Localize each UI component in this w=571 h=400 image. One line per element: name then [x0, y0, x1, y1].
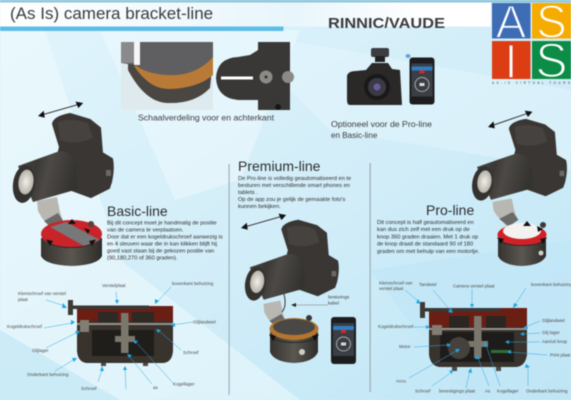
diagram: Basic-line cross-section — [7, 281, 216, 391]
logo: AS-IS: S — [535, 35, 568, 88]
description: graden om met behulp van een motortje. — [377, 249, 480, 255]
camera — [470, 120, 566, 202]
top stripe — [0, 0, 571, 2]
labels: as — [153, 385, 159, 390]
labels: Onderkant behuizing — [27, 372, 69, 377]
description: besturen met verschillende smart phones en — [238, 183, 350, 189]
description — [238, 176, 351, 210]
camera — [10, 114, 113, 204]
labels: Onderkant behuizing — [526, 388, 568, 394]
labels: plaat — [18, 297, 29, 302]
diagram: Pro-line cross-section — [378, 280, 571, 394]
heading: Pro-line — [426, 202, 474, 218]
description: Door dat er een kogeldrukschroef aanwezig is — [107, 234, 223, 240]
labels: Kogeldrukschroef — [7, 324, 43, 329]
labels: Aan/uit knop — [542, 339, 568, 344]
panel: Pro-line — [377, 108, 566, 266]
bracket — [37, 197, 64, 230]
labels — [7, 281, 216, 391]
logo: AS-IS: I — [504, 36, 518, 89]
housing — [420, 302, 527, 371]
arrow: camera tilt — [487, 108, 534, 130]
labels: Kogellager — [497, 388, 519, 394]
labels: Motor — [399, 344, 411, 349]
description: tablets . — [238, 190, 258, 196]
description: Bij dit concept moet je handmatig de positie — [107, 220, 217, 226]
labels: Schroef — [81, 386, 97, 391]
description: De Pro-line is volledig geautomatiseerd en te — [238, 176, 351, 182]
title underline — [0, 26, 284, 31]
phone — [331, 317, 356, 364]
heading: Premium-line — [238, 158, 321, 174]
arrow: camera tilt — [37, 100, 84, 119]
callout: control cable: besturings — [328, 294, 350, 300]
labels: Verstelplaat — [102, 283, 126, 288]
caption: scale: Schaalverdeling voor en achterkant — [138, 114, 275, 122]
rotating base — [497, 221, 547, 266]
callout arrows — [405, 288, 547, 388]
bracket — [263, 300, 286, 328]
divider: right — [370, 163, 371, 392]
description: knop 360 graden draaien. Met 1 druk op — [377, 234, 478, 240]
description: en 4 sleuven waar die in kan klikken blijft hij — [107, 242, 217, 248]
logo: AS-IS — [492, 0, 571, 89]
description — [107, 220, 223, 262]
photo: camera with trigger — [347, 48, 402, 105]
description: goed vast staan bij de gekozen positie van — [107, 248, 214, 254]
title: (As Is) camera bracket-line — [10, 4, 213, 23]
panel: Basic-line — [10, 100, 223, 266]
text: optional: Optioneel voor de Pro-line — [331, 120, 433, 129]
labels: Camera verstel plaat — [453, 284, 495, 288]
header band — [0, 2, 491, 26]
labels: Print plaat — [550, 352, 571, 358]
labels: Glijlandwiel — [542, 318, 565, 323]
labels: verstel plaat — [379, 286, 404, 291]
labels: Glijlager — [32, 348, 49, 353]
description: kan dus zich zelf met een druk op de — [377, 227, 470, 233]
labels: Klemschroef van verstel — [18, 291, 66, 296]
labels: Tandwiel — [419, 282, 437, 287]
camera — [243, 221, 338, 302]
labels: Schroef — [183, 350, 199, 355]
description — [377, 220, 480, 255]
labels: bovenkant behuizing — [172, 281, 214, 286]
text: optional: en Basic-line — [331, 131, 378, 140]
labels: Kogeldrukschroef — [378, 324, 414, 329]
logo: AS-IS: AS-IS VIRTUAL TOURS — [492, 81, 570, 85]
bracket — [493, 198, 518, 226]
labels: Klemschroef van — [379, 280, 413, 286]
labels: Glijlandwiel — [193, 320, 216, 324]
phone: app — [410, 58, 434, 104]
labels — [378, 280, 571, 394]
rotating base — [269, 315, 319, 363]
labels: Glij lager — [542, 330, 560, 335]
callout: control cable: kabel — [328, 300, 339, 306]
callout arrows — [44, 287, 193, 389]
description: kunnen bekijken. — [238, 204, 281, 210]
labels: bevestigings plaat — [439, 388, 476, 394]
labels: As — [485, 388, 491, 394]
description: Dit concept is half geautomatiseerd en — [377, 220, 474, 226]
control cable — [282, 294, 285, 312]
labels: Accu — [396, 378, 407, 384]
text: optional — [331, 120, 433, 140]
description: van de camera te verplaatsen. — [107, 228, 184, 234]
photo: scale front detail — [121, 42, 213, 110]
housing — [68, 300, 173, 366]
photo: scale rear detail — [216, 42, 294, 110]
description: de knop draait de standaard 90 of 180 — [377, 242, 473, 248]
panel: Premium-line — [238, 158, 356, 364]
callout: control cable — [291, 294, 350, 307]
icon: wireless signal — [406, 54, 410, 58]
labels: Kogellager — [173, 382, 195, 386]
rotating base — [41, 219, 102, 266]
divider: left — [228, 164, 230, 395]
heading: Basic-line — [107, 203, 168, 219]
description: Op de app zou je gelijk de gemaakte foto's — [238, 197, 345, 203]
description: (90,180,270 of 360 graden). — [107, 256, 178, 262]
brand: RINNIC/VAUDE: RINNIC/VAUDE — [328, 15, 445, 32]
labels: Schroef — [415, 388, 431, 394]
arrow: camera tilt — [240, 212, 287, 231]
